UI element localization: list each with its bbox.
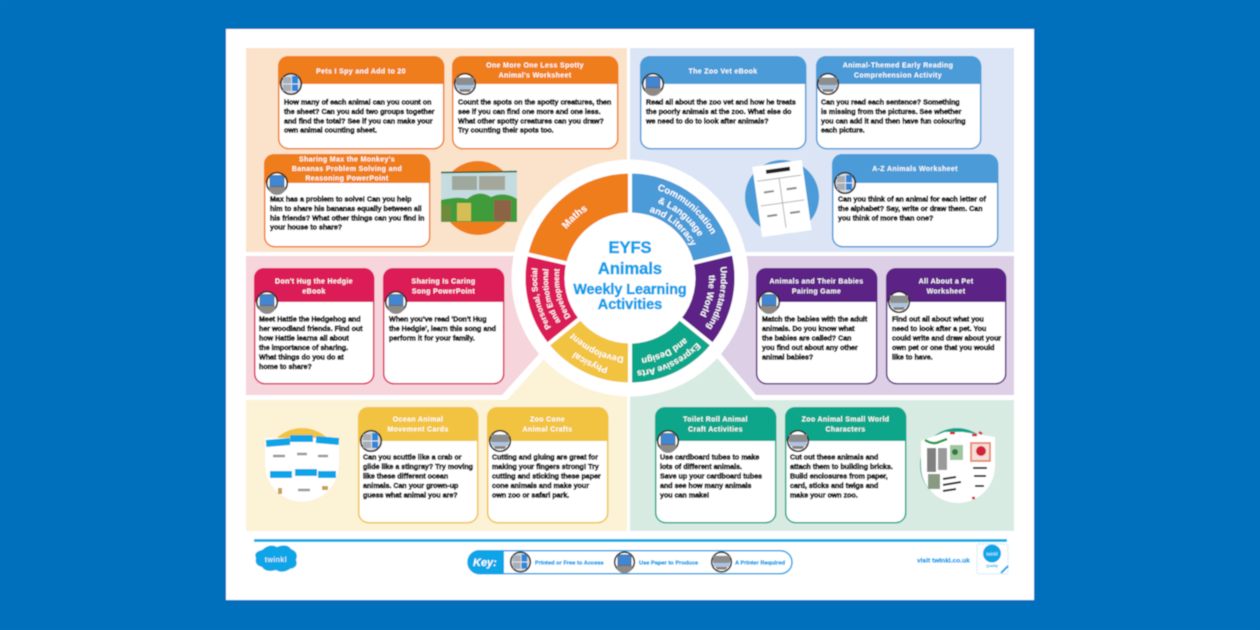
twinkl stamp: Quality [986,564,998,568]
segment: Physical Development [550,320,629,383]
panel: personal social background [246,256,540,395]
segment: Physical Development: Development [569,332,624,364]
card: Sharing Max the Monkey's Bananas: your house to share? [270,224,342,232]
card: A-Z Animals Worksheet: you think of more than one? [838,214,933,222]
segment: Communication and Language and Literacy: and Literacy [649,206,696,246]
card: All About a Pet [886,268,1006,384]
twinkl stamp [977,544,1008,574]
segment: Maths: Maths [560,206,588,230]
maths cards [264,56,618,247]
card: Early Reading Comprehension: Comprehension Activity [854,72,942,80]
card: One More One Less: Animal's Worksheet [499,72,572,80]
picture: movement cards [265,428,339,502]
card: Early Reading Comprehension: Can you read each sentence? Something [821,98,960,106]
card: Don't Hug the Hedgie: her woodland friends. Find out [259,325,363,333]
card: Ocean Animal Movement Cards: Can you scuttle like a crab or [363,454,462,462]
card: A-Z Animals Worksheet: the alphabet? Say, write or draw them. Can [838,205,983,213]
card: Toilet Roll Animal Craft: Use cardboard tubes to make [660,454,759,462]
card: Sharing Max the Monkey's Bananas: his friends? What other things can you find in [270,214,424,222]
card: Animals and Their Babies: animal babies? [762,354,813,362]
card: Don't Hug the Hedgie: What things do you do at [259,354,344,362]
personal social cards [254,268,504,384]
picture: monkey powerpoint [441,161,517,235]
understanding the world cards [756,268,1006,384]
card: One More One Less: see if you can find one more and one less. [458,108,601,116]
card: Don't Hug the Hedgie: eBook [302,288,326,296]
picture: worksheet [745,160,819,237]
segment: Physical Development: Physical [571,352,608,374]
card: Toilet Roll Animal Craft: Toilet Roll Animal [683,416,748,424]
card: Don't Hug the Hedgie: the importance of sharing. [259,344,348,352]
card: Pets I Spy: own animal counting sheet. [284,127,377,135]
panel: expressive arts background [630,358,1014,531]
segment: Understanding the World: the World [699,274,716,318]
card: Sharing Is Caring: perform it for your family. [389,334,475,342]
key: Key: [473,557,497,569]
card: One More One Less: What other spotty creatures can you draw? [458,117,604,125]
card: All About a Pet: Worksheet [927,288,966,296]
card: Sharing Is Caring: the Hedgie', learn this song and [389,325,496,333]
card: Animals and Their Babies: Match the babies with the adult [762,316,868,324]
card: Sharing Max the Monkey's Bananas: Reasoning PowerPoint [305,176,389,182]
card: Animals and Their Babies [756,268,877,384]
card: The Zoo Vet eBook: The Zoo Vet eBook [689,68,757,76]
card: Sharing Max the Monkey's Bananas: Sharing Max the Monkey's [299,156,395,164]
card: Ocean Animal Movement Cards: animals. Can your grown-up [363,482,459,490]
card: Pets I Spy [278,56,444,149]
card: Toilet Roll Animal Craft [655,407,776,523]
card: Pets I Spy: and find the total? See if you can make your [284,117,433,125]
segment: Communication and Language and Literacy: Communication [658,184,716,235]
card: All About a Pet: All About a Pet [919,278,974,286]
card: Don't Hug the Hedgie: Don't Hug the Hedgie [275,278,353,286]
card: Ocean Animal Movement Cards: like these different ocean [363,472,448,480]
segment: Understanding the World [682,251,736,342]
segment: Personal, Social and Emotional Development: Development [553,268,572,320]
card: Don't Hug the Hedgie: Meet Hattie the Hedgehog and [259,316,361,324]
card: All About a Pet: need to look after a pet. You [892,325,986,333]
card: Zoo Animal Small World: card, sticks and twigs and [790,482,878,490]
twinkl stamp: twinkl [986,552,998,556]
key item: printer: A Printer Required [735,560,786,566]
card: The Zoo Vet eBook [640,56,806,149]
card: Zoo Animal Small World: Zoo Animal Small World [802,416,889,424]
card: Zoo Animal Small World: Cut out these animals and [790,454,878,462]
card: Ocean Animal Movement Cards: Ocean Animal [393,416,443,424]
card: The Zoo Vet eBook: we need to do to look after animals? [645,117,769,125]
card: Sharing Max the Monkey's Bananas: him to share his bananas equally between all [270,205,422,213]
segment: Personal, Social and Emotional Development: Personal, Social [530,267,552,330]
key item: printer [712,552,786,572]
website: visit twinkl.co.uk [917,558,970,564]
card: Animals and Their Babies: the babies are called? Can [762,334,852,342]
card: One More One Less: One More One Less Spotty [486,62,584,70]
title: Activities [598,297,662,313]
segment: Expressive Arts and Design: Expressive Arts [636,342,702,377]
card: Don't Hug the Hedgie [254,268,374,384]
communication cards [640,56,998,247]
card: Zoo Cone Animal Crafts: Cutting and gluing are great for [492,454,598,462]
card: A-Z Animals Worksheet: Can you think of an animal for each letter of [838,196,986,204]
segment: Expressive Arts and Design: and Design [640,338,688,364]
card: Early Reading Comprehension [816,56,981,149]
card: Don't Hug the Hedgie: how Hattie learns all about [259,334,350,342]
card: Sharing Is Caring [383,268,504,384]
key item: print: Printed or Free to Access [535,560,604,566]
card: Ocean Animal Movement Cards: Movement Cards [387,426,449,434]
card: Sharing Max the Monkey's Bananas [264,154,430,247]
card: A-Z Animals Worksheet: A-Z Animals Worksheet [872,166,958,173]
title: Weekly Learning [573,282,687,298]
card: Ocean Animal Movement Cards [358,407,478,523]
card: Zoo Cone Animal Crafts: cutting and sticking these paper [492,472,601,480]
panel: physical development background [246,358,627,531]
card: Zoo Animal Small World: make your own zoo. [790,492,858,500]
card: Zoo Cone Animal Crafts: own zoo or safari park. [492,492,569,500]
segment: Expressive Arts and Design [631,318,712,384]
card: Animals and Their Babies: Pairing Game [792,288,841,296]
segment: Communication and Language and Literacy [631,173,732,262]
segment: Communication and Language and Literacy: & Language [658,197,703,237]
card: Zoo Cone Animal Crafts: Animal Crafts [522,426,573,434]
card: Toilet Roll Animal Craft: Craft Activities [688,426,743,434]
card: Zoo Animal Small World: attach them to building bricks. [790,463,893,471]
card: All About a Pet: Find out all about what you [892,316,984,324]
card: All About a Pet: own pet or one that you would [892,344,994,352]
card: The Zoo Vet eBook: the poorly animals at the zoo. What else do [646,108,792,116]
title: EYFS [608,239,652,257]
expressive arts cards [655,407,995,523]
card: One More One Less [452,56,618,149]
panel: communication background [630,48,1014,252]
twinkl logo: twinkl [265,555,287,564]
card: One More One Less: Count the spots on the spotty creatures, then [458,98,611,106]
card: Don't Hug the Hedgie: home to share? [259,363,312,371]
card: Zoo Cone Animal Crafts: cone animals and make your [492,482,589,490]
card: Sharing Max the Monkey's Bananas: Max has a problem to solve! Can you help [270,196,412,204]
card: All About a Pet: like to have. [892,354,933,362]
title [573,239,687,313]
card: Pets I Spy: Pets I Spy and Add to 20 [316,68,406,76]
card: Zoo Animal Small World: Build enclosures from paper, [790,472,888,480]
card: Sharing Is Caring: Sharing Is Caring [412,278,475,286]
wheel white backing [512,160,748,396]
key item: computer [615,552,698,573]
white sheet [226,29,1034,600]
card: Animals and Their Babies: animals. Do you know what [762,325,855,333]
card: Toilet Roll Animal Craft: lots of different animals. [660,463,742,471]
card: Zoo Animal Small World [785,407,906,523]
card: Early Reading Comprehension: is missing from the pictures. See whether [821,108,962,116]
card: Ocean Animal Movement Cards: glide like a stingray? Try moving [363,463,473,471]
card: Pets I Spy: the sheet? Can you add two groups together [284,108,435,116]
card: Sharing Is Caring: Song PowerPoint [412,288,475,296]
key item: print [511,552,604,572]
card: Pets I Spy: How many of each animal can you count on [284,98,431,106]
footer [254,539,1008,574]
title: Animals [598,260,662,278]
segment: Personal, Social and Emotional Development: and Emotional [542,268,561,324]
card: Zoo Cone Animal Crafts [487,407,608,523]
card: Zoo Cone Animal Crafts: Zoo Cone [530,416,565,424]
physical development cards [265,407,608,523]
card: A-Z Animals Worksheet [832,154,998,247]
card: Animals and Their Babies: Animals and Their Babies [770,278,863,286]
segment: Maths [528,172,629,262]
card: Toilet Roll Animal Craft: Save up your cardboard tubes [660,472,762,480]
card: Toilet Roll Animal Craft: and see how many animals [660,482,752,490]
panel: maths background [246,48,627,252]
card: Ocean Animal Movement Cards: guess what animal you are? [363,492,458,500]
card: One More One Less: Try counting their spots too. [458,127,554,135]
card: Toilet Roll Animal Craft: you can make! [660,492,709,500]
segment: Personal, Social and Emotional Development [524,252,580,346]
central wheel [511,159,749,397]
key [468,550,792,574]
footer rule [254,539,1007,542]
card: Early Reading Comprehension: Animal-Themed Early Reading [843,62,953,70]
panel: understanding the world background [720,256,1014,395]
card: Early Reading Comprehension: you can add it and then have fun colouring [821,117,966,125]
segment: Understanding the World: Understanding [705,266,728,330]
key item: computer: Use Paper to Produce [639,560,698,566]
twinkl logo [255,545,297,572]
card: The Zoo Vet eBook: Read all about the zoo vet and how he treats [646,98,796,106]
picture: small world characters [920,428,995,503]
card: Zoo Cone Animal Crafts: making your fingers strong! Try [492,463,599,471]
card: All About a Pet: could write and draw about your [892,334,1001,342]
card: Zoo Animal Small World: Characters [825,426,866,434]
card: Sharing Max the Monkey's Bananas: Bananas Problem Solving and [292,166,402,173]
card: Animals and Their Babies: you find out about any other [762,344,858,352]
card: Early Reading Comprehension: each picture. [821,127,865,135]
card: Sharing Is Caring: When you've read 'Don't Hug [389,316,487,324]
